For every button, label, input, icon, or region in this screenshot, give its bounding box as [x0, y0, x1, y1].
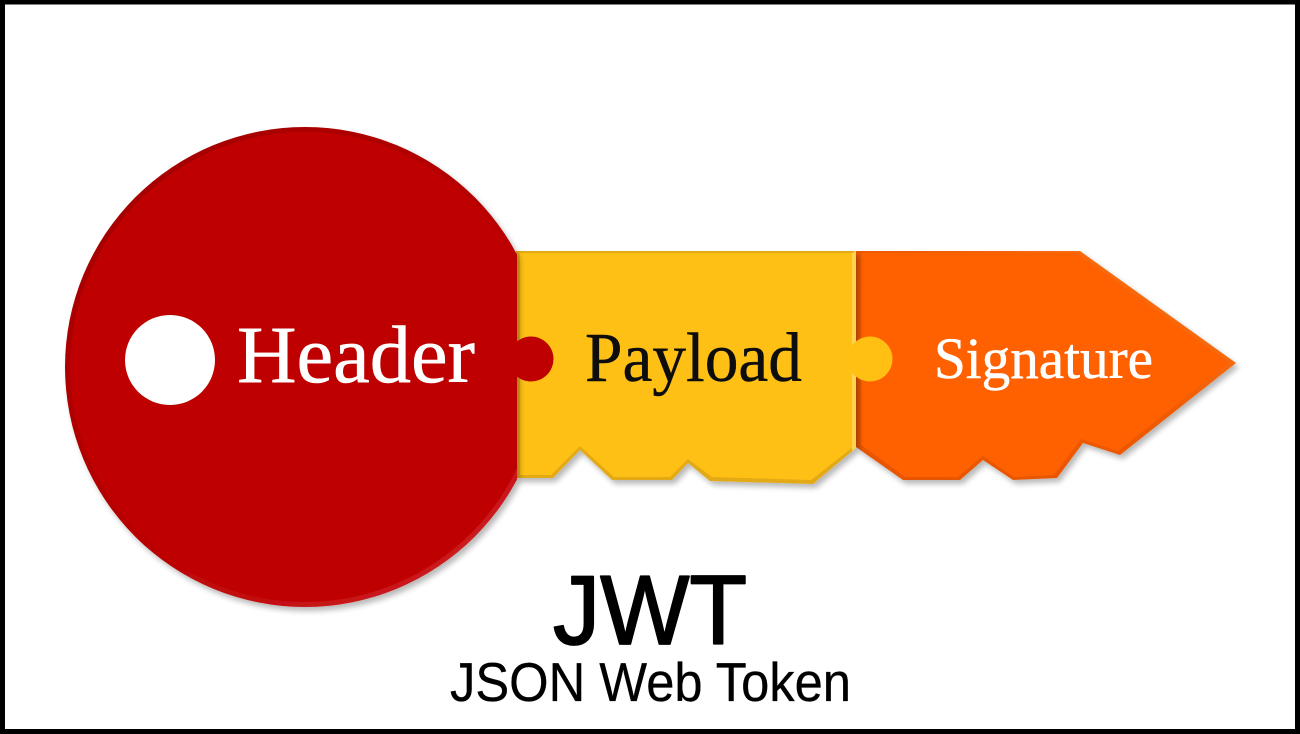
connector dot: red — [508, 336, 554, 382]
title: JWT — [553, 555, 747, 665]
signature label: Signature — [934, 326, 1153, 391]
key hole — [125, 315, 215, 405]
header label: Header — [237, 309, 475, 400]
subtitle: JSON Web Token — [450, 651, 851, 713]
key tooth section: payload — [516, 251, 856, 484]
payload label: Payload — [585, 320, 802, 397]
key head: header circle — [65, 127, 545, 607]
connector dot: yellow — [848, 336, 892, 382]
key tooth section: signature — [856, 251, 1236, 480]
